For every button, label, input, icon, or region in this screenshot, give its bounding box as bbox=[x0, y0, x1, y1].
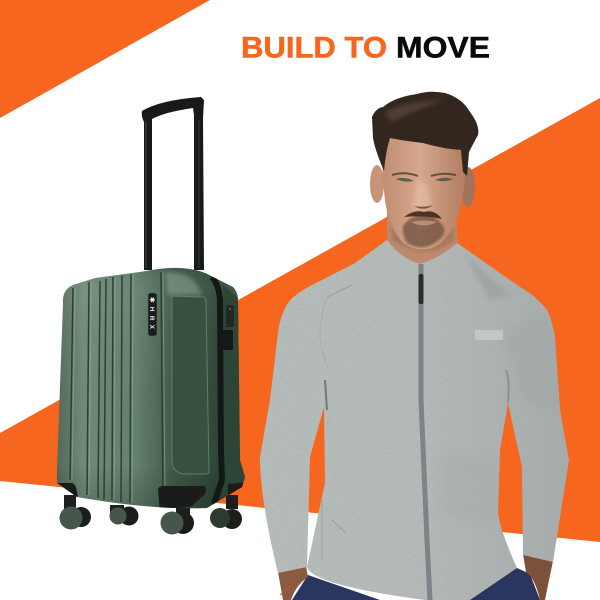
man bbox=[255, 92, 575, 600]
title: BUILD TO bbox=[241, 32, 387, 64]
title bbox=[241, 32, 490, 64]
zipper pull bbox=[418, 274, 424, 304]
corner guard right bbox=[228, 482, 244, 496]
front left wheel bbox=[60, 495, 91, 530]
zipper bbox=[212, 277, 222, 504]
title: MOVE bbox=[396, 32, 490, 64]
left hand bbox=[278, 566, 308, 600]
hair highlight bbox=[384, 100, 445, 122]
corner guard front bbox=[158, 486, 206, 508]
suitcase bbox=[50, 97, 250, 534]
rear right wheel bbox=[210, 495, 242, 529]
wrist band bbox=[280, 581, 296, 595]
jacket folds and shading bbox=[320, 242, 560, 560]
telescopic handle bbox=[142, 97, 204, 270]
navy trousers bbox=[292, 568, 540, 600]
orange diagonal band bbox=[0, 98, 600, 542]
right ear bbox=[461, 167, 475, 207]
brand badge bbox=[148, 293, 157, 336]
face bbox=[382, 135, 466, 250]
corner guard left bbox=[57, 483, 78, 498]
hair bbox=[372, 92, 478, 176]
left ear bbox=[370, 165, 384, 203]
beard bbox=[403, 214, 445, 247]
top highlight bbox=[165, 272, 203, 295]
grey zip jacket bbox=[260, 240, 569, 600]
moustache and lips bbox=[404, 211, 442, 226]
shell body bbox=[57, 268, 245, 508]
neck shadow bbox=[390, 225, 455, 251]
front right wheel bbox=[160, 500, 194, 534]
rear left wheel bbox=[110, 505, 138, 526]
shell shading and ribs bbox=[57, 270, 245, 508]
eyes and brows bbox=[392, 173, 456, 182]
brand badge: ✱HRX bbox=[148, 297, 156, 330]
recessed side panel bbox=[172, 296, 209, 474]
orange triangle top-left bbox=[0, 0, 210, 118]
neck bbox=[387, 205, 458, 264]
combination lock bbox=[220, 305, 234, 350]
right hand bbox=[523, 554, 553, 600]
nose shading bbox=[413, 180, 433, 209]
zipper tape bbox=[421, 264, 430, 600]
chest logo patch bbox=[475, 330, 503, 340]
